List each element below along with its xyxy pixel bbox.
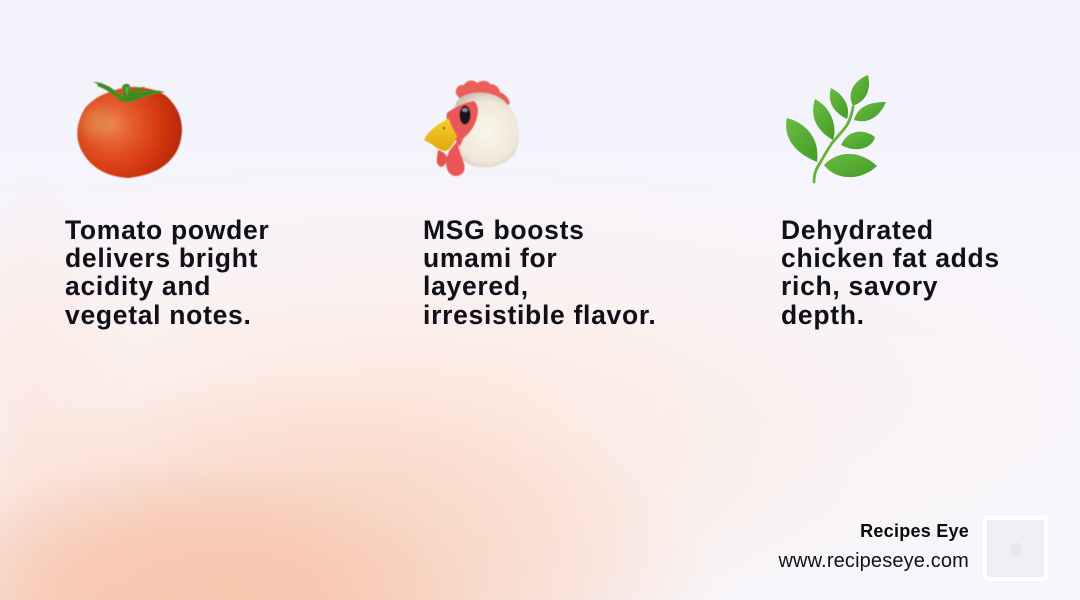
text: tomato caption: vegetal notes. [65,300,252,330]
icon: tomato [76,81,183,179]
logo mark [1011,542,1021,556]
text: chicken fat caption: depth. [781,300,865,330]
text: chicken fat caption: rich, savory [781,271,938,301]
text: chicken fat caption: chicken fat adds [781,243,1000,273]
icon: herb [786,75,886,184]
footer brand name: Recipes Eye [860,521,969,541]
text: tomato caption: delivers bright [65,243,258,273]
text: chicken fat caption [781,215,1000,330]
footer website: www.recipeseye.com [778,550,969,572]
text: MSG caption: layered, [423,271,529,301]
text: MSG caption: umami for [423,243,557,273]
text: MSG caption: irresistible flavor. [423,300,656,330]
text: chicken fat caption: Dehydrated [781,215,934,245]
text: tomato caption [65,215,269,330]
text: tomato caption: Tomato powder [65,215,269,245]
text: tomato caption: acidity and [65,271,211,301]
text: MSG caption: MSG boosts [423,215,585,245]
logo box [983,516,1048,581]
text: MSG caption [423,215,656,330]
icon: chicken [424,80,520,177]
